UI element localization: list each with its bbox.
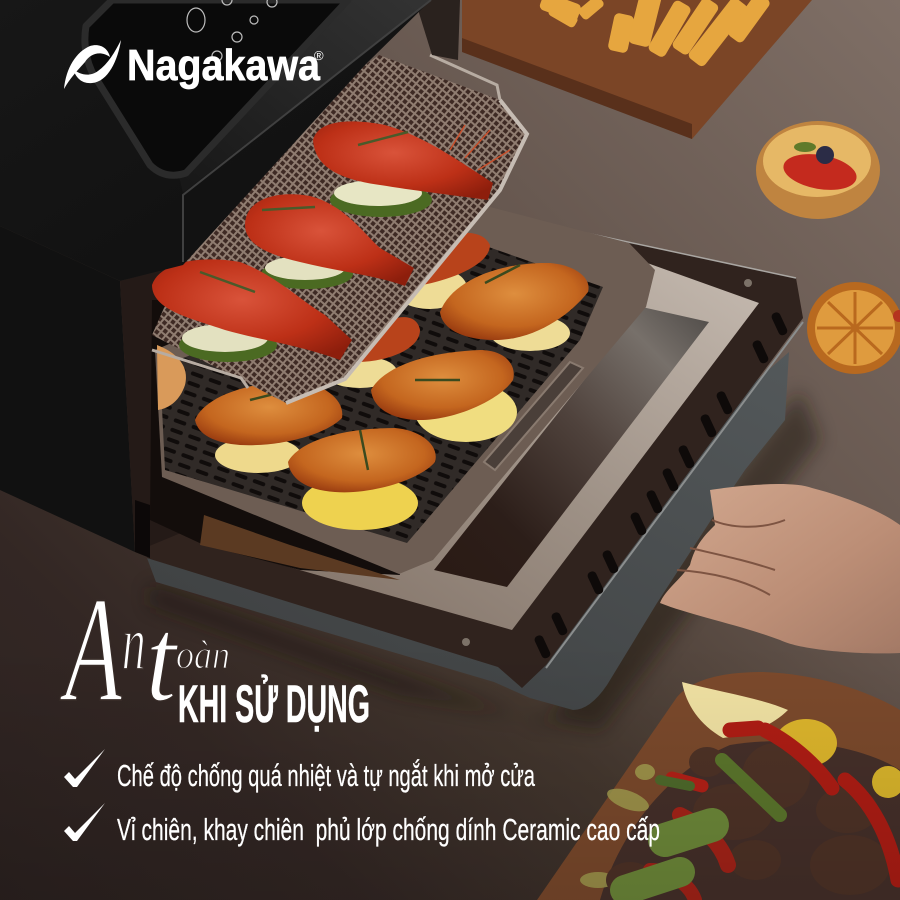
script heading: A bbox=[60, 566, 122, 734]
bold heading: KHI SỬ DỤNG bbox=[178, 674, 370, 734]
wordmark: Nagakawa bbox=[127, 41, 320, 90]
lower body of fryer bbox=[0, 226, 400, 580]
air fryer tray bbox=[155, 207, 655, 574]
bullet text one: Chế độ chống quá nhiệt và tự ngắt khi mở cửa bbox=[117, 758, 535, 793]
script heading bbox=[60, 566, 230, 734]
check icon two bbox=[64, 803, 105, 841]
door handle bbox=[147, 352, 789, 710]
brand logo bbox=[64, 40, 324, 90]
hand pulling door bbox=[660, 484, 900, 653]
bottom vignette bbox=[0, 640, 900, 900]
oven door shadow bbox=[150, 390, 820, 730]
check icon one bbox=[64, 749, 105, 787]
logo swoosh mark bbox=[64, 40, 121, 89]
script heading: t bbox=[146, 593, 178, 726]
door glass window bbox=[434, 307, 709, 587]
dried orange slice bbox=[807, 282, 900, 374]
bullet text two: Vỉ chiên, khay chiên phủ lớp chống dính Ceramic cao cấp bbox=[117, 812, 660, 847]
shrimp row bbox=[152, 121, 493, 362]
tray slot bbox=[484, 362, 583, 470]
script heading: oàn bbox=[176, 633, 230, 677]
fruit tart bbox=[756, 121, 880, 219]
wire rack grid bbox=[160, 243, 603, 543]
door silver inner panel bbox=[204, 255, 759, 630]
control panel icons bbox=[187, 0, 277, 61]
script heading: n bbox=[122, 600, 146, 687]
oven door outer frame bbox=[147, 230, 803, 688]
cutting board with fries bbox=[462, 0, 812, 139]
chicken wings with lemon bbox=[157, 233, 589, 530]
wire fry basket with shrimp bbox=[152, 55, 527, 403]
control panel outline bbox=[85, 0, 348, 175]
serving plate with grilled skewers bbox=[537, 672, 900, 900]
registered mark: ® bbox=[314, 48, 324, 63]
air fryer upper housing bbox=[0, 0, 460, 281]
